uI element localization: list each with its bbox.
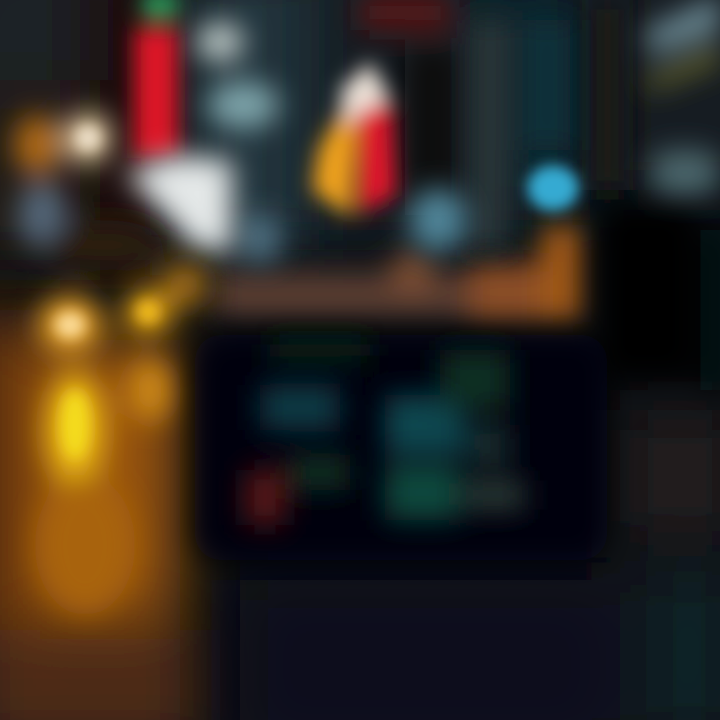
white shape (125, 155, 232, 252)
phone body (195, 335, 607, 560)
lamp highlights (55, 126, 159, 459)
flag: striped sail (312, 62, 396, 218)
red banner with green top (134, 0, 180, 158)
background: upper city (0, 0, 720, 260)
blue light (527, 165, 579, 211)
left lamps (14, 112, 209, 615)
background: street glow on the left (0, 310, 200, 720)
pale lights top centre (196, 22, 468, 264)
dark building column at right (595, 0, 720, 390)
background: lower pavement (240, 410, 720, 720)
top right signs (360, 0, 720, 250)
phone screen content (245, 340, 525, 525)
brown band behind phone (215, 225, 582, 322)
